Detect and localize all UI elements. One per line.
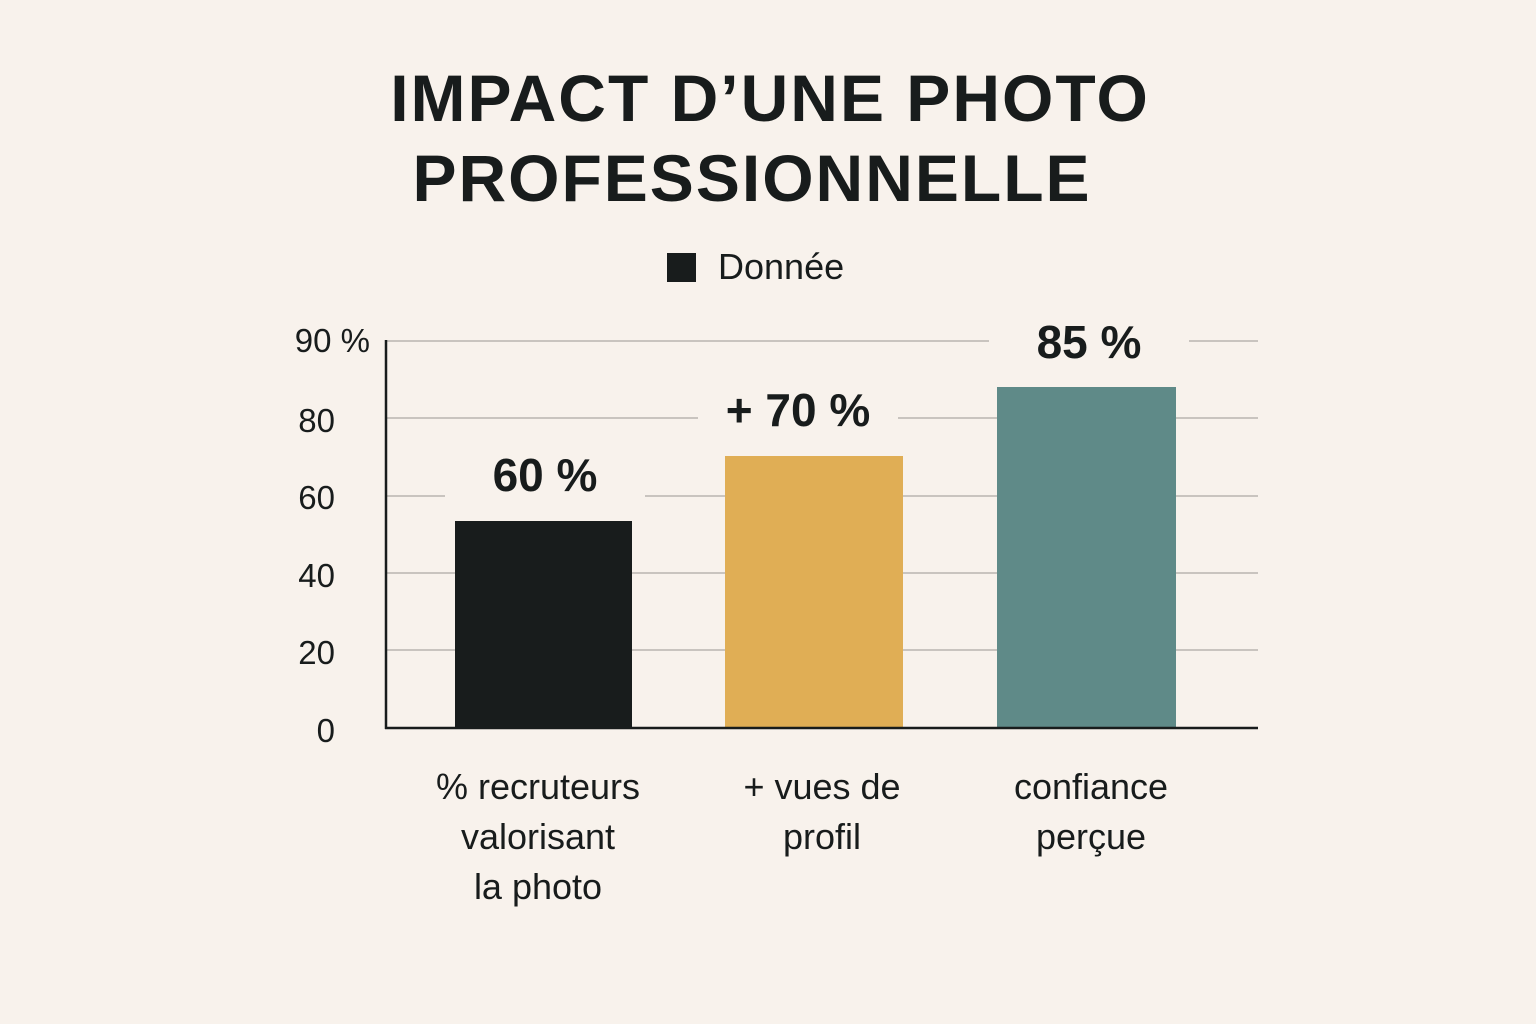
value labels bbox=[445, 316, 1189, 501]
y-axis ticks: 80 bbox=[298, 402, 335, 439]
y-axis ticks: 0 bbox=[317, 712, 335, 749]
value labels: 60 % bbox=[493, 449, 597, 501]
category labels: confiance bbox=[1014, 766, 1168, 807]
bar: confiance bbox=[997, 387, 1176, 728]
bar: recruteurs bbox=[455, 521, 632, 728]
y-axis ticks bbox=[295, 322, 370, 749]
y-axis ticks: 40 bbox=[298, 557, 335, 594]
y-axis ticks: 90 % bbox=[295, 322, 370, 359]
title: PROFESSIONNELLE bbox=[412, 141, 1092, 215]
bar chart bbox=[295, 316, 1258, 907]
category labels: profil bbox=[783, 816, 861, 857]
category labels: la photo bbox=[474, 866, 602, 907]
category labels: valorisant bbox=[461, 816, 615, 857]
legend: Donnée bbox=[718, 246, 844, 287]
category labels: perçue bbox=[1036, 816, 1146, 857]
title bbox=[390, 61, 1150, 215]
category labels bbox=[436, 766, 1168, 907]
category labels: % recruteurs bbox=[436, 766, 640, 807]
bar: vues bbox=[725, 456, 903, 728]
title: IMPACT D’UNE PHOTO bbox=[390, 61, 1150, 135]
value labels: 85 % bbox=[1037, 316, 1141, 368]
category labels: + vues de bbox=[743, 766, 901, 807]
value labels: + 70 % bbox=[726, 384, 870, 436]
y-axis ticks: 60 bbox=[298, 479, 335, 516]
y-axis ticks: 20 bbox=[298, 634, 335, 671]
